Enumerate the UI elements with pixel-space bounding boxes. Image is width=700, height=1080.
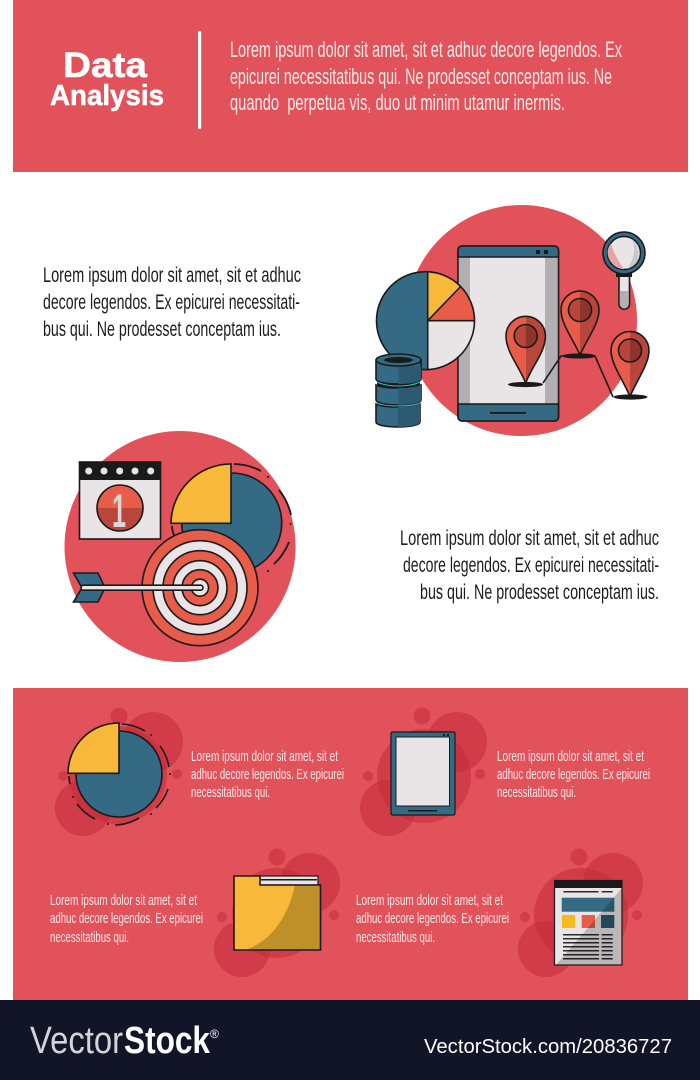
panel: lower feature panel — [13, 688, 688, 1000]
text: folder item — [50, 893, 203, 946]
icon: map pin 2 — [561, 291, 599, 359]
calendar number: 1 — [112, 484, 126, 537]
footer logo — [30, 1020, 219, 1062]
footer url: VectorStock.com/20836727 — [424, 1036, 672, 1058]
feature: folder item — [50, 848, 340, 977]
footer logo: Stock — [124, 1020, 211, 1062]
icon: calendar — [80, 462, 160, 539]
icon: magnifying glass — [603, 232, 645, 309]
panel: header banner — [13, 0, 688, 172]
text: pie chart item: necessitatibus qui. — [191, 785, 270, 801]
icon: arrow — [74, 573, 203, 602]
text: folder item: adhuc decore legendos. Ex epicurei — [50, 911, 203, 927]
icon: smartphone — [458, 246, 558, 421]
pin connector lines — [543, 356, 613, 397]
footer logo: ® — [210, 1027, 219, 1041]
icon: tablet — [391, 732, 455, 815]
icon: small pie chart — [68, 723, 171, 825]
text block: upper left: decore legendos. Ex epicurei necessitati- — [43, 290, 300, 314]
text: document item: adhuc decore legendos. Ex epicurei — [356, 911, 509, 927]
text: tablet item — [497, 749, 650, 801]
title: Data Analysis — [50, 46, 164, 112]
illustration: calendar, pie and target — [64, 431, 296, 662]
text: document item — [356, 893, 509, 946]
title: Data Analysis: Analysis — [50, 80, 164, 112]
footer logo: Vector — [30, 1020, 123, 1062]
text: document item: Lorem ipsum dolor sit amet, sit et — [356, 893, 503, 909]
icon: pie chart — [376, 270, 476, 370]
text: pie chart item: Lorem ipsum dolor sit amet, sit et — [191, 749, 338, 765]
icon: map pin 3 — [611, 332, 649, 400]
icon: pie chart with quarter — [171, 464, 292, 573]
feature: pie chart item — [55, 708, 344, 836]
icon: map pin 1 — [506, 316, 545, 387]
feature: tablet item — [360, 708, 650, 836]
icon: folder — [234, 876, 320, 950]
header text block — [230, 37, 622, 115]
text: folder item: necessitatibus qui. — [50, 930, 129, 946]
illustration: phone with map pins — [370, 205, 649, 436]
text block: upper left: bus qui. Ne prodesset conceptam ius. — [43, 317, 281, 341]
text block: upper left — [43, 263, 301, 341]
feature: document item — [356, 848, 643, 977]
text block: upper left: Lorem ipsum dolor sit amet, sit et adhuc — [43, 263, 301, 287]
text: folder item: Lorem ipsum dolor sit amet, sit et — [50, 893, 197, 909]
panel: footer watermark bar — [0, 1000, 700, 1080]
text: tablet item: necessitatibus qui. — [497, 785, 576, 801]
icon: target — [142, 530, 258, 646]
text: document item: necessitatibus qui. — [356, 930, 435, 946]
text: pie chart item: adhuc decore legendos. Ex epicurei — [191, 767, 344, 783]
icon: news document — [554, 880, 622, 965]
text block: middle right — [400, 526, 659, 604]
title: Data Analysis: Data — [63, 46, 148, 85]
text: pie chart item — [191, 749, 344, 801]
icon: database — [376, 354, 421, 427]
